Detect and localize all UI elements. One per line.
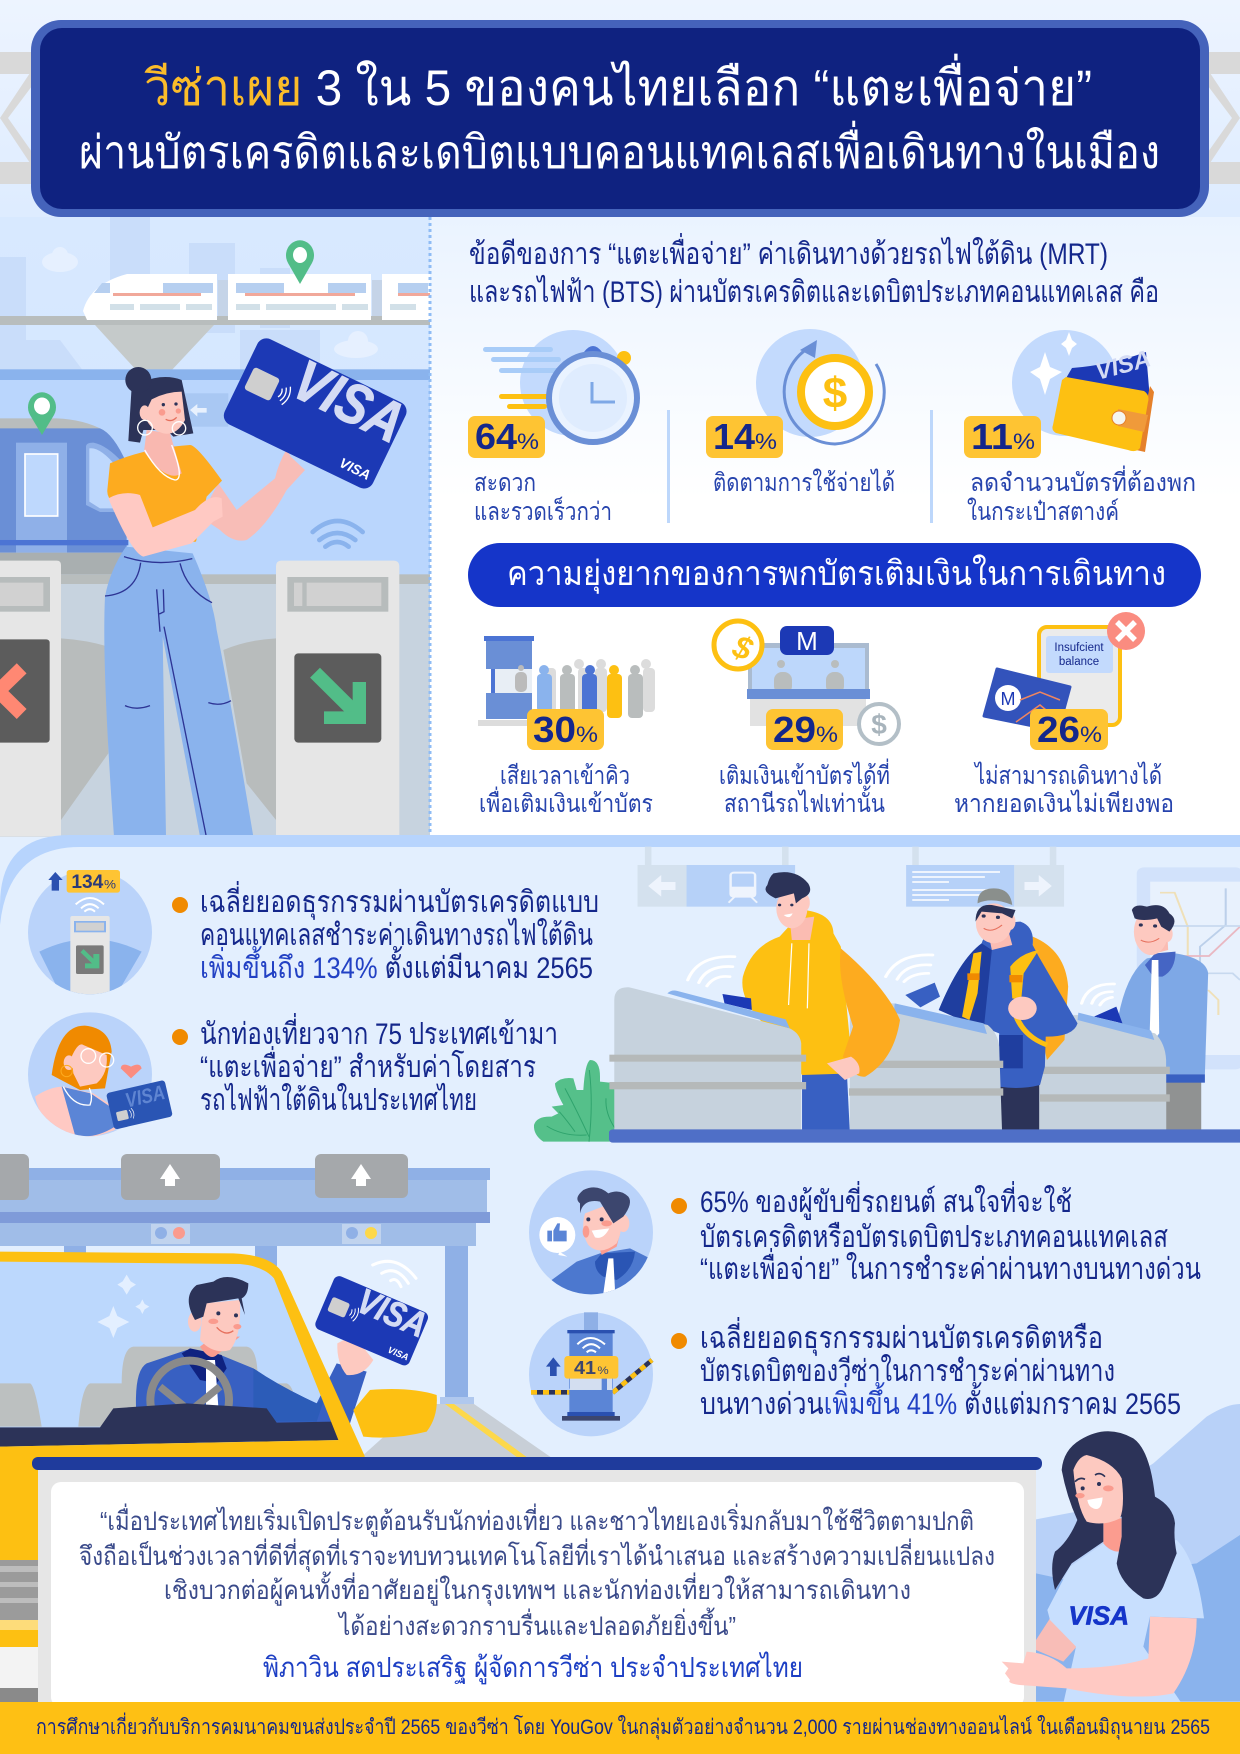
difficulty: insufficient balance xyxy=(954,612,1174,818)
map pin upper xyxy=(286,240,314,284)
difficulty: queue xyxy=(478,636,655,818)
toll lights xyxy=(151,1224,381,1244)
badge 29% xyxy=(766,709,843,750)
metro train xyxy=(0,418,133,574)
bullet dot xyxy=(172,897,188,913)
coin icon: $ xyxy=(823,369,847,418)
badge 30%: % xyxy=(576,722,598,747)
badge 29%: 29 xyxy=(773,709,816,750)
icon: driver thumbs up xyxy=(529,1170,653,1300)
difficulty: top-up only at station xyxy=(714,621,899,818)
jeans xyxy=(104,547,253,837)
badge 29%: % xyxy=(816,722,838,747)
quote author: พิภาวิน สดประเสริฐ ผู้จัดการวีซ่า ประจำประเทศไทย xyxy=(263,1652,803,1685)
badge 26%: 26 xyxy=(1037,709,1080,750)
label xyxy=(474,469,612,526)
label: และรวดเร็วกว่า xyxy=(474,496,612,526)
passenger 3 xyxy=(1094,905,1208,1132)
fact: 75 countries: รถไฟฟ้าใต้ดินในประเทศไทย xyxy=(200,1082,477,1117)
title line 1: วีซ่าเผย 3 ใน 5 ของคนไทยเลือก “แตะเพื่อจ่าย” xyxy=(144,54,1092,116)
label: สถานีรถไฟเท่านั้น xyxy=(724,785,885,818)
rail structure behind title xyxy=(0,52,1240,184)
direction sign right xyxy=(906,847,1064,907)
right ticket gate xyxy=(276,561,399,837)
quote panel xyxy=(32,1457,1042,1707)
toll pillars xyxy=(64,1246,474,1404)
card reader icon: balance xyxy=(1059,656,1099,668)
benefits heading: ข้อดีของการ “แตะเพื่อจ่าย” ค่าเดินทางด้วยรถไฟใต้ดิน (MRT) xyxy=(469,233,1108,271)
badge 64%: 64 xyxy=(475,416,517,457)
fact: 41% toll: เฉลี่ยยอดธุรกรรมผ่านบัตรเครดิตหรือ xyxy=(700,1317,1103,1357)
station background xyxy=(0,380,430,575)
sparkles xyxy=(97,1275,149,1338)
small direction sign xyxy=(185,393,228,427)
jeans seams xyxy=(105,557,231,835)
shirt logo: VISA xyxy=(1068,1601,1129,1631)
fact: 65% drivers xyxy=(700,1181,1201,1286)
quote text: ได้อย่างสะดวกราบรื่นและปลอดภัยยิ่งขึ้น” xyxy=(337,1607,736,1641)
title panel xyxy=(31,20,1209,217)
illustration: station gates with three passengers xyxy=(609,847,1240,1143)
crossed arm xyxy=(108,493,223,557)
gate base xyxy=(609,1129,1240,1143)
badge 14% xyxy=(706,416,783,458)
icon: tourist with card: VISA xyxy=(123,1081,167,1112)
toll plaza illustration xyxy=(0,1154,552,1458)
small card logo: VISA xyxy=(386,1345,410,1363)
neck xyxy=(1103,1518,1128,1552)
windshield xyxy=(0,1260,343,1448)
footer xyxy=(0,1702,1240,1754)
woman xyxy=(104,367,305,837)
quote text xyxy=(79,1503,995,1641)
wallet icon: VISA xyxy=(1093,345,1154,386)
label: เพื่อเติมเงินเข้าบัตร xyxy=(479,786,653,818)
ticket booth icon: $ xyxy=(727,627,758,668)
dotted divider xyxy=(428,217,432,835)
label: เติมเงินเข้าบัตรได้ที่ xyxy=(719,758,890,790)
bullet dot xyxy=(172,1029,188,1045)
card chip xyxy=(244,367,280,401)
driver hand xyxy=(337,1335,373,1375)
label: สะดวก xyxy=(474,469,536,497)
card reader icon xyxy=(984,612,1145,731)
skyline xyxy=(0,217,320,380)
icon: metro gate with 134%: 134 xyxy=(71,872,104,893)
badge 14%: % xyxy=(755,429,777,454)
car frame xyxy=(0,1252,365,1457)
hair back xyxy=(128,377,193,443)
icon: metro gate with 134%: % xyxy=(104,877,116,891)
benefits heading xyxy=(469,233,1159,309)
station floor xyxy=(0,574,430,837)
passenger 2 xyxy=(905,888,1078,1132)
car hood xyxy=(0,1440,365,1461)
back arm xyxy=(1036,1618,1077,1662)
card reader icon: M xyxy=(1000,689,1016,709)
road xyxy=(360,1404,552,1458)
icon: toll gate 41%: % xyxy=(597,1365,609,1377)
divider xyxy=(667,410,670,523)
toll canopy xyxy=(0,1168,490,1246)
label xyxy=(967,465,1196,526)
bullet dot xyxy=(671,1198,687,1214)
passenger 1 xyxy=(722,872,900,1132)
fact: 75 countries: “แตะเพื่อจ่าย” สำหรับค่าโดยสาร xyxy=(200,1046,536,1084)
clock icon xyxy=(483,330,637,442)
small Visa card xyxy=(315,1276,428,1366)
icon: toll gate 41% xyxy=(529,1312,653,1436)
badge 26% xyxy=(1030,709,1108,750)
driver xyxy=(136,1277,367,1439)
contactless symbol xyxy=(278,386,292,406)
label: ในกระเป๋าสตางค์ xyxy=(967,497,1119,526)
wifi 3 xyxy=(1082,984,1114,1005)
right panel background xyxy=(430,217,1240,842)
badge 30% xyxy=(527,709,604,750)
benefit: track spending xyxy=(706,329,895,497)
label: ลดจำนวนบัตรที่ต้องพก xyxy=(970,465,1196,497)
contactless symbol xyxy=(348,1306,360,1322)
fact: 134% metro: เฉลี่ยยอดธุรกรรมผ่านบัตรเครดิตแบบ xyxy=(200,881,599,921)
facial details xyxy=(159,402,181,421)
fact: 134% metro: เพิ่มขึ้นถึง 134% ตั้งแต่มีนาคม 2565 xyxy=(200,946,593,985)
background hills xyxy=(1036,1404,1240,1702)
left ticket gate xyxy=(0,561,61,837)
gate 2 xyxy=(849,1003,1003,1131)
badge 30%: 30 xyxy=(533,709,576,750)
fact: 41% toll xyxy=(700,1317,1181,1421)
quote text: จึงถือเป็นช่วงเวลาที่ดีที่สุดที่เราจะทบทวนเทคโนโลยีที่เราได้นำเสนอ และสร้างความเปลี่ยนแปลง xyxy=(79,1538,995,1572)
divider xyxy=(930,410,933,523)
map pin lower xyxy=(28,392,56,435)
neck xyxy=(144,430,182,476)
label: ติดตามการใช้จ่ายได้ xyxy=(713,468,895,497)
arm and hand xyxy=(1002,1617,1197,1697)
label xyxy=(954,761,1174,818)
card logo: VISA xyxy=(283,348,414,456)
car body lower left xyxy=(0,1456,38,1702)
wifi icon xyxy=(313,521,363,547)
icon: toll gate 41%: 41 xyxy=(574,1357,596,1378)
side mirror xyxy=(353,1389,437,1438)
fact: 134% metro: คอนแทคเลสชำระค่าเดินทางรถไฟใต้ดิน xyxy=(200,917,593,952)
ticket booth icon: $ xyxy=(871,709,887,740)
necklace xyxy=(145,445,179,480)
elevated track xyxy=(0,316,431,372)
badge 11%: % xyxy=(1013,429,1035,454)
fact: 65% drivers: 65% ของผู้ขับขี่รถยนต์ สนใจที่จะใช้ xyxy=(700,1181,1072,1220)
face xyxy=(145,392,185,434)
badge 64%: % xyxy=(517,429,539,454)
label: เสียเวลาเข้าคิว xyxy=(500,762,630,790)
shirt xyxy=(1047,1540,1204,1703)
quote text: เชิงบวกต่อผู้คนทั้งที่อาศัยอยู่ในกรุงเทพฯ และนักท่องเที่ยวให้สามารถเดินทาง xyxy=(164,1571,911,1606)
sign arrows xyxy=(160,1164,371,1186)
card chip xyxy=(327,1297,350,1318)
top background xyxy=(0,0,1240,240)
label: หากยอดเงินไม่เพียงพอ xyxy=(954,789,1174,818)
icon: tourist with card xyxy=(28,1012,173,1138)
plant xyxy=(534,1060,617,1142)
station band xyxy=(0,369,430,380)
wifi 2 xyxy=(886,955,933,982)
fact: 134% metro xyxy=(200,881,599,985)
label: ไม่สามารถเดินทางได้ xyxy=(973,761,1162,790)
sky train xyxy=(83,274,431,320)
left illustration: station with woman and Visa card xyxy=(0,217,431,837)
wallet icon xyxy=(1012,330,1154,452)
coin icon xyxy=(756,329,884,444)
section heading pill: ความยุ่งยากของการพกบัตรเติมเงินในการเดินทาง xyxy=(507,554,1166,594)
ticket booth icon xyxy=(714,621,899,744)
dashboard xyxy=(0,1403,341,1447)
badge 14%: 14 xyxy=(713,416,755,457)
fact: 41% toll: บัตรเดบิตของวีซ่าในการชำระค่าผ่านทาง xyxy=(700,1354,1115,1388)
woman spokesperson xyxy=(1002,1431,1204,1703)
queue icon xyxy=(478,636,655,726)
wifi icon xyxy=(373,1261,416,1287)
gate 3 xyxy=(1039,1013,1170,1131)
bullet dot xyxy=(671,1333,687,1349)
middle panel inner xyxy=(0,847,1240,1754)
card logo: VISA xyxy=(351,1281,433,1345)
card reader icon: Insufcient xyxy=(1054,642,1104,654)
badge 26%: % xyxy=(1080,722,1102,747)
benefit: fewer cards xyxy=(964,330,1196,526)
face details xyxy=(1075,1474,1114,1509)
icon: metro gate with 134% xyxy=(28,870,152,1000)
label xyxy=(719,758,890,818)
ear xyxy=(140,405,148,420)
toll signs xyxy=(0,1154,408,1200)
hair bun xyxy=(125,367,151,393)
raised arm xyxy=(210,452,305,541)
earrings xyxy=(138,420,186,435)
orange top xyxy=(107,445,222,545)
label xyxy=(479,762,653,818)
car with driver xyxy=(0,1252,437,1461)
large Visa card xyxy=(224,338,407,488)
direction sign left xyxy=(638,847,795,907)
fact: 75 countries xyxy=(200,1013,558,1117)
wifi 1 xyxy=(688,957,735,986)
fact: 75 countries: นักท่องเที่ยวจาก 75 ประเทศเข้ามา xyxy=(200,1013,558,1051)
clouds xyxy=(42,247,378,358)
middle panel xyxy=(0,835,1240,1754)
gate 1 xyxy=(609,987,806,1131)
face xyxy=(1073,1455,1123,1524)
section heading pill xyxy=(468,543,1201,607)
hair xyxy=(1052,1431,1177,1599)
ticket booth icon: M xyxy=(796,626,818,656)
badge 64% xyxy=(468,416,545,458)
badge 11% xyxy=(964,416,1041,458)
badge 11%: 11 xyxy=(971,416,1013,457)
quote text: “เมื่อประเทศไทยเริ่มเปิดประตูต้อนรับนักท่องเที่ยว และชาวไทยเองเริ่มกลับมาใช้ชีวิตตามปกติ xyxy=(100,1503,974,1537)
metro map panel xyxy=(1137,867,1240,1069)
seats xyxy=(0,1347,297,1427)
fact: 41% toll: บนทางด่วนเพิ่มขึ้น 41% ตั้งแต่มกราคม 2565 xyxy=(700,1382,1181,1421)
benefit: convenient and faster xyxy=(468,330,637,526)
small card logo: VISA xyxy=(337,454,373,483)
